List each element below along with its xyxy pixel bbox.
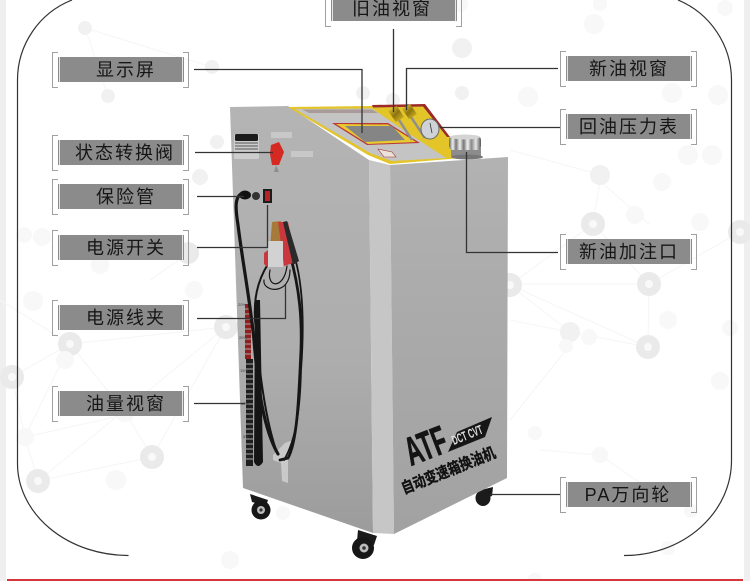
oil level window: 20%	[238, 302, 246, 307]
oil level window: 10%	[241, 401, 249, 406]
screen	[345, 126, 405, 142]
label: 保险管: 保险管	[96, 187, 156, 207]
label: 回油压力表: 回油压力表	[579, 117, 679, 137]
logo: DCT CVT tag: DCT CVT	[450, 422, 485, 448]
label: 新油加注口	[560, 234, 696, 270]
instruction sticker	[234, 134, 259, 159]
label: 保险管	[52, 180, 188, 214]
battery clamp	[264, 221, 299, 268]
label: 新油加注口: 新油加注口	[579, 242, 679, 262]
power socket	[239, 190, 260, 200]
label: 显示屏: 显示屏	[96, 60, 156, 80]
bracket hook	[273, 440, 293, 483]
new oil sight tube	[402, 104, 417, 119]
old oil sight tube	[388, 106, 404, 122]
cabinet right face	[390, 157, 508, 534]
logo: ATF: ATF	[398, 418, 453, 474]
oil level window: 15%	[240, 368, 248, 373]
panel yellow border	[288, 104, 461, 164]
panel top print strip	[302, 110, 378, 113]
bottom red rule	[7, 579, 743, 581]
label: 新油视窗	[560, 52, 696, 86]
machine	[230, 104, 508, 559]
label: 状态转换阀	[52, 136, 188, 170]
oil level window: 20%	[239, 335, 247, 340]
panel red trim	[372, 104, 450, 137]
logo: DCT CVT tag	[448, 417, 492, 452]
logo: Chinese product name: 自动变速箱换油机	[399, 444, 498, 497]
label: 回油压力表	[560, 110, 696, 144]
label: 电源开关	[52, 230, 188, 266]
tube rods	[399, 117, 425, 140]
cabinet corner strip	[369, 160, 394, 534]
panel grey face	[295, 108, 446, 161]
caster: front	[352, 530, 377, 559]
oil level window	[238, 300, 263, 466]
label: 新油视窗: 新油视窗	[589, 59, 669, 79]
status valve	[270, 132, 313, 172]
label: 显示屏	[52, 52, 188, 88]
label: 电源开关: 电源开关	[86, 238, 166, 258]
cabinet left face	[230, 106, 373, 533]
caster: rear right	[476, 487, 493, 506]
cables	[236, 194, 303, 460]
label: PA万向轮: PA万向轮	[585, 485, 671, 505]
warning sticker	[378, 149, 396, 157]
label: 油量视窗	[52, 386, 188, 422]
caster: rear left	[250, 494, 270, 520]
filler cap	[449, 134, 483, 160]
label: 状态转换阀: 状态转换阀	[75, 143, 175, 163]
label: 油量视窗: 油量视窗	[86, 394, 166, 414]
screen frame	[332, 123, 420, 145]
label: PA万向轮	[560, 478, 696, 512]
label: 旧油视窗	[326, 0, 462, 26]
oil level window: 5%	[243, 434, 249, 439]
power switch	[263, 189, 272, 203]
return oil pressure gauge	[421, 119, 439, 139]
leader lines	[194, 29, 560, 494]
label: 电源线夹	[52, 300, 188, 336]
control panel	[288, 104, 461, 164]
label: 电源线夹: 电源线夹	[86, 308, 166, 328]
